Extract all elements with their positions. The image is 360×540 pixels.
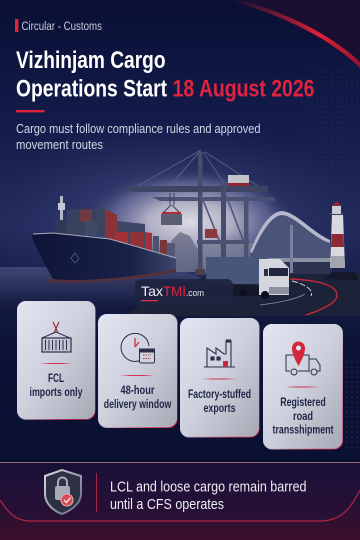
notice text: until a CFS operates bbox=[110, 497, 224, 513]
title: Operations Start bbox=[16, 76, 167, 102]
subtitle: Cargo must follow compliance rules and approved bbox=[16, 121, 260, 136]
card: 48-hour delivery window: 48-hour bbox=[120, 383, 155, 397]
logo badge: Tax bbox=[141, 283, 163, 299]
card: Factory-stuffed exports bbox=[180, 318, 260, 438]
card: FCL imports only bbox=[17, 301, 96, 420]
lighthouse bbox=[329, 201, 345, 268]
bottom notice panel bbox=[0, 462, 360, 521]
card: Factory-stuffed exports: exports bbox=[204, 401, 236, 415]
title: 18 August 2026 bbox=[172, 76, 314, 102]
card: FCL imports only: FCL bbox=[48, 371, 64, 385]
icon: shield with lock bbox=[45, 470, 81, 514]
notice text: LCL and loose cargo remain barred bbox=[110, 480, 306, 496]
card: Registered road transshipment: transshipment bbox=[272, 422, 334, 436]
water bbox=[0, 267, 205, 312]
subtitle bbox=[16, 121, 260, 152]
card: FCL imports only: imports only bbox=[30, 385, 83, 399]
card: Factory-stuffed exports: Factory-stuffed bbox=[188, 387, 251, 401]
port illustration bbox=[0, 150, 360, 316]
title rule bbox=[16, 110, 44, 112]
icon: container on hook bbox=[42, 322, 71, 352]
road bbox=[130, 272, 360, 316]
card: Registered road transshipment: Registered bbox=[280, 395, 326, 409]
logo badge: TMI bbox=[163, 283, 186, 299]
card: 48-hour delivery window: delivery window bbox=[104, 397, 172, 411]
title bbox=[16, 47, 314, 102]
eyebrow: circular label: Circular - Customs bbox=[22, 21, 102, 33]
subtitle: movement routes bbox=[16, 137, 103, 152]
red corner arc bbox=[228, 0, 360, 68]
card: Registered road transshipment bbox=[263, 324, 343, 450]
ship bbox=[31, 196, 176, 283]
truck bbox=[206, 257, 289, 299]
logo badge bbox=[135, 279, 233, 307]
crane bbox=[122, 150, 275, 275]
terminal building bbox=[250, 211, 332, 274]
icon: clock and calendar bbox=[121, 333, 154, 363]
notice text bbox=[110, 480, 306, 513]
eyebrow: circular label bbox=[15, 19, 102, 33]
city skyline bbox=[166, 232, 198, 272]
logo badge: .com bbox=[186, 288, 204, 298]
title: Vizhinjam Cargo bbox=[16, 47, 166, 74]
icon: factory bbox=[204, 340, 235, 367]
card: 48-hour delivery window bbox=[98, 314, 178, 428]
icon: truck with pin bbox=[286, 342, 320, 375]
card: Registered road transshipment: road bbox=[293, 409, 313, 423]
